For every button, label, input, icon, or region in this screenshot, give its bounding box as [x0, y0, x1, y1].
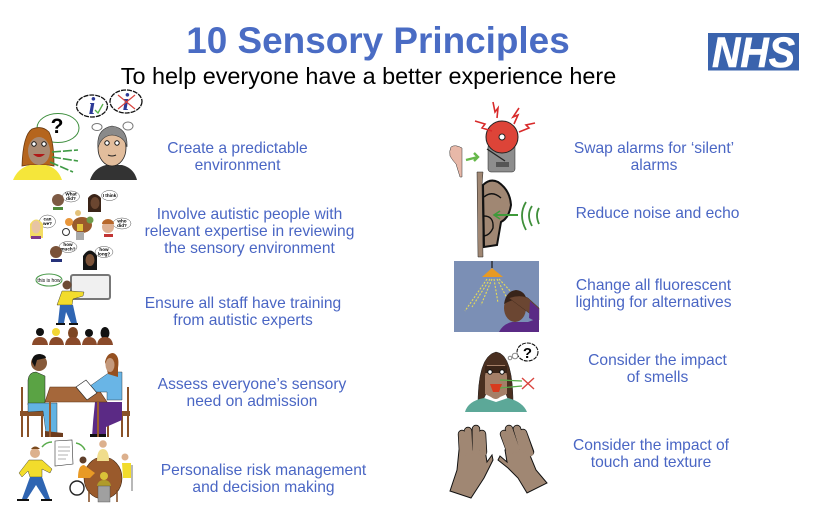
icon: group of autistic people discussing around table: how	[99, 247, 109, 252]
text: involve autistic people: Involve autistic people with	[157, 206, 342, 223]
text: silent alarms: alarms	[631, 157, 677, 174]
text: staff training: Ensure all staff have training	[145, 295, 341, 312]
text: assess sensory need: Assess everyone’s sensory	[158, 376, 346, 393]
NHS logo: NHS	[712, 29, 795, 77]
icon: trainer presenting to audience	[32, 274, 113, 345]
text: silent alarms: Swap alarms for ‘silent’	[574, 140, 734, 157]
text: staff training: from autistic experts	[173, 312, 313, 329]
icon: woman and man with speech and thought bubbles: i	[89, 94, 96, 120]
text: personalise risk management	[161, 462, 366, 496]
icon: fluorescent lamp above man shielding eyes	[454, 261, 539, 332]
text: create a predictable environment: environment	[195, 157, 280, 174]
icon: woman smelling with crossed-out arrows	[465, 343, 538, 412]
icon: two hands	[450, 429, 547, 498]
text: involve autistic people: the sensory environment	[164, 240, 335, 257]
subtitle: To help everyone have a better experience here	[121, 63, 616, 89]
icon: bell alarm with ear	[450, 102, 535, 177]
text: fluorescent lighting: lighting for alternatives	[575, 294, 732, 311]
icon: two people at table assessing needs	[21, 353, 129, 437]
text: touch and texture: Consider the impact of	[573, 437, 729, 454]
icon: group of autistic people discussing around table	[30, 190, 131, 270]
text: smells: of smells	[627, 369, 688, 386]
text: personalise risk management: and decision making	[192, 479, 335, 496]
text: fluorescent lighting	[575, 277, 732, 311]
icon: group of autistic people discussing around table: can	[44, 216, 52, 222]
text: reduce noise: Reduce noise and echo	[576, 205, 739, 222]
icon: group of autistic people discussing around table: did?	[66, 196, 76, 201]
text: assess sensory need: need on admission	[187, 393, 317, 410]
text: personalise risk management: Personalise risk management	[161, 462, 366, 479]
text: involve autistic people	[145, 206, 354, 257]
text: staff training	[145, 295, 341, 329]
icon: group of autistic people discussing around table: we?	[42, 221, 52, 226]
text: assess sensory need	[158, 376, 346, 410]
icon: trainer presenting to audience: this is how	[37, 278, 61, 284]
icon: group of autistic people discussing around table: What	[65, 192, 77, 196]
icon: group of autistic people discussing around table: much?	[60, 246, 76, 252]
text: involve autistic people: relevant expertise in reviewing	[145, 223, 354, 240]
text: touch and texture: touch and texture	[591, 454, 711, 471]
text: fluorescent lighting: Change all fluorescent	[576, 277, 731, 294]
icon: woman and man with speech and thought bubbles: i	[123, 90, 130, 116]
text: create a predictable environment	[167, 140, 308, 174]
title: 10 Sensory Principles	[186, 20, 570, 61]
text: smells	[588, 352, 727, 386]
text: silent alarms	[574, 140, 734, 174]
icon: woman and man with speech and thought bubbles: ?	[51, 115, 63, 138]
icon: person with risk plan and group meeting	[17, 440, 132, 502]
icon: woman smelling with crossed-out arrows: ?	[523, 345, 532, 362]
icon: group of autistic people discussing around table: who	[116, 218, 127, 224]
icon: group of autistic people discussing around table: did?	[117, 223, 127, 228]
icon: ear with sound waves	[477, 172, 539, 257]
text: create a predictable environment: Create a predictable	[167, 140, 308, 157]
icon: group of autistic people discussing around table: I think	[103, 193, 117, 198]
icon: group of autistic people discussing around table: how	[63, 242, 73, 247]
text: touch and texture	[573, 437, 729, 471]
icon: woman and man with speech and thought bubbles	[13, 90, 142, 180]
icon: group of autistic people discussing around table: long?	[98, 252, 110, 256]
text: smells: Consider the impact	[588, 352, 727, 369]
